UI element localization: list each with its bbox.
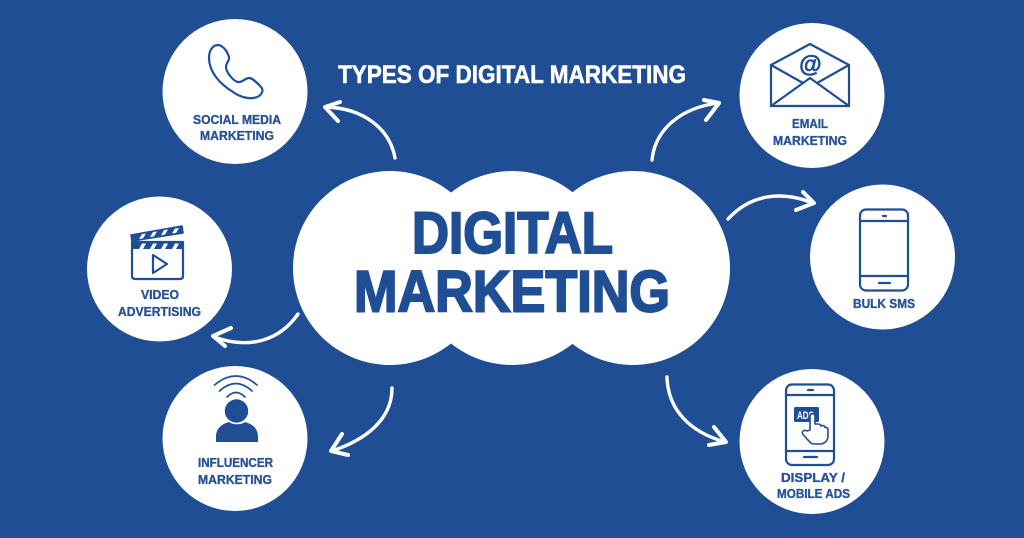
icon: open envelope [771, 44, 849, 106]
icon: telephone handset [209, 45, 262, 98]
label: bulk sms: BULK SMS [853, 297, 915, 311]
central cloud: digital marketing [293, 171, 730, 365]
label: email marketing: EMAIL [792, 117, 828, 131]
icon: phone with ads button and pointing hand: ADS [797, 410, 814, 422]
icon: open envelope: @ [799, 51, 821, 77]
label: display / mobile ads [777, 471, 850, 501]
label: display / mobile ads: DISPLAY / [781, 471, 846, 485]
label: social media marketing [193, 113, 281, 143]
label: influencer marketing: INFLUENCER [198, 456, 273, 470]
label: social media marketing: MARKETING [200, 129, 274, 143]
panel: display and mobile ads [740, 369, 884, 514]
label: video advertising: VIDEO [141, 288, 179, 302]
panel: bulk sms [810, 184, 955, 330]
label: video advertising [118, 288, 201, 319]
central cloud: digital marketing: MARKETING [354, 260, 670, 324]
icon: phone with ads button and pointing hand [786, 384, 834, 465]
panel: video advertising [87, 196, 232, 342]
arrow: to email marketing [652, 100, 719, 160]
arrow: to video advertising [213, 314, 298, 346]
title: TYPES OF DIGITAL MARKETING [338, 61, 686, 89]
arrow: to influencer marketing [331, 388, 392, 455]
arrow: to bulk sms [728, 192, 814, 219]
panel: email marketing [740, 23, 884, 168]
label: display / mobile ads: MOBILE ADS [777, 487, 850, 501]
central cloud: digital marketing: DIGITAL [412, 201, 613, 266]
label: social media marketing: SOCIAL MEDIA [193, 113, 281, 127]
label: influencer marketing [198, 456, 273, 487]
label: email marketing: MARKETING [773, 134, 847, 148]
panel: influencer marketing [162, 366, 308, 511]
label: video advertising: ADVERTISING [118, 305, 201, 319]
arrow: to display and mobile ads [667, 377, 726, 445]
arrow: to social media marketing [325, 102, 395, 158]
icon: person broadcasting signal [214, 376, 258, 442]
label: influencer marketing: MARKETING [198, 473, 272, 487]
panel: social media marketing [162, 19, 308, 164]
icon: film clapperboard [131, 226, 183, 279]
icon: smartphone [860, 210, 908, 290]
label: email marketing [773, 117, 847, 148]
